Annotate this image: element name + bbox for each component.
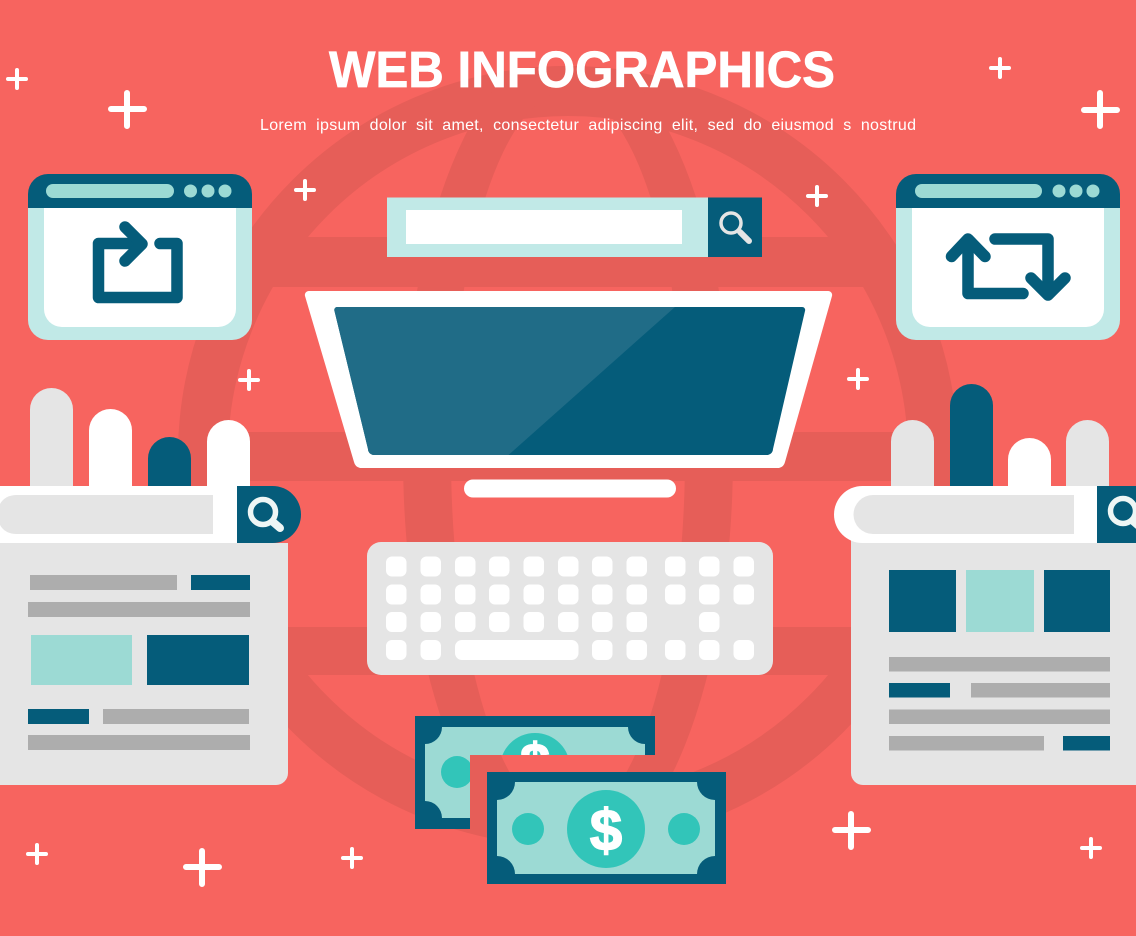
panel: left browser window (28, 174, 252, 340)
icon: magnifier (721, 213, 749, 241)
panel: right web page (834, 384, 1136, 785)
bar chart: right (891, 384, 1109, 487)
search bar (387, 198, 762, 257)
back banknote: $ (520, 733, 550, 793)
front banknote (487, 772, 726, 884)
icon: retweet arrows (952, 239, 1065, 295)
title: WEB INFOGRAPHICS (329, 41, 835, 98)
panel: left web page (0, 388, 301, 785)
back banknote (415, 716, 655, 829)
page content blocks (28, 575, 250, 750)
icon: share arrow (98, 227, 177, 298)
keyboard (367, 542, 773, 675)
monitor (305, 291, 832, 498)
front banknote: $ (590, 798, 622, 863)
icon: magnifier (1110, 498, 1136, 527)
monitor stand (464, 480, 676, 498)
icon: magnifier (250, 500, 280, 528)
banknotes (415, 716, 726, 884)
panel: right browser window (896, 174, 1120, 340)
subtitle: Lorem ipsum dolor sit amet, consectetur adipiscing elit, sed do eiusmod s nostrud (260, 117, 916, 134)
bar chart: left (30, 388, 250, 487)
background globe (170, 46, 970, 866)
page content blocks (889, 570, 1110, 750)
